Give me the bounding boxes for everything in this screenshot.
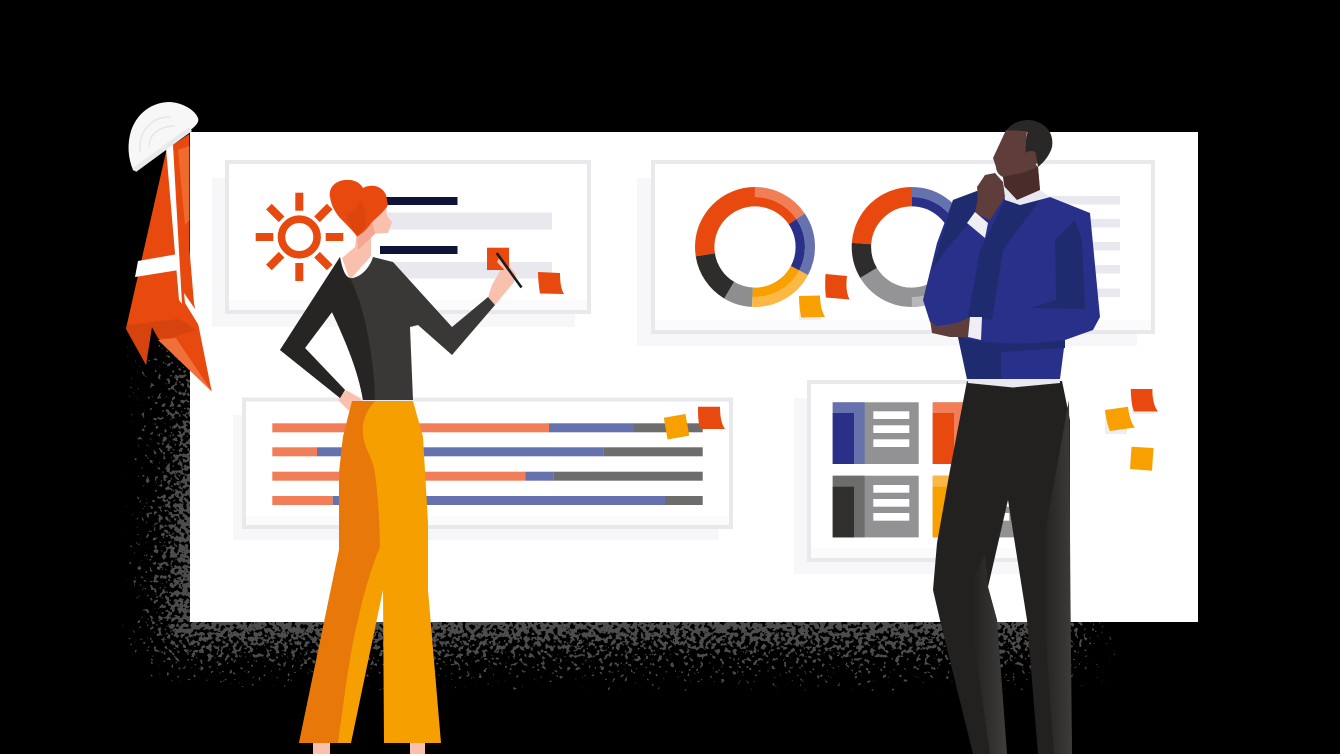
sticky notes: right cluster [1105, 389, 1158, 471]
text lines [380, 197, 552, 278]
whiteboard [190, 132, 1198, 622]
collar [1003, 185, 1050, 205]
hair [330, 180, 388, 236]
bar row 2 [272, 447, 703, 456]
trousers [933, 381, 1072, 754]
sticky note: red, top left panel [538, 272, 564, 294]
trousers [299, 401, 441, 743]
sticky note: yellow, bar panel [664, 414, 689, 439]
shirt hem [967, 378, 1060, 388]
lower hand at hip [338, 390, 364, 413]
panel: tiles [794, 382, 1040, 574]
icon: sun [256, 193, 343, 281]
tile: dark [833, 476, 919, 537]
sticky note: red, bar panel [698, 407, 725, 429]
pen [497, 253, 522, 288]
tile: yellow [933, 476, 1019, 537]
speckled board shadow [122, 345, 1118, 694]
man figure [923, 120, 1100, 754]
tile: blue [833, 402, 919, 464]
ear [1023, 150, 1039, 166]
feet [313, 742, 425, 754]
woman figure [280, 180, 522, 754]
hard hat [129, 102, 198, 172]
lower cuff [968, 317, 982, 340]
hair [1007, 120, 1052, 167]
bar row 1 [272, 423, 703, 432]
panel: sun and text lines [212, 162, 589, 327]
panel: stacked bars [233, 400, 731, 540]
sticky note: yellow, between donuts [799, 296, 825, 320]
hand holding pen [488, 258, 516, 305]
neck and face [342, 205, 392, 280]
sticky note: red, between donuts [825, 274, 850, 300]
sticky note being placed [487, 248, 509, 270]
panel: donut charts [637, 162, 1153, 346]
fingers [497, 258, 512, 274]
legend lines [1045, 196, 1120, 297]
safety vest [126, 134, 212, 392]
donut chart 2 [857, 192, 967, 302]
face and neck [993, 130, 1040, 202]
hand on chin [975, 173, 1005, 220]
bar row 3 [272, 472, 703, 481]
top [280, 257, 495, 400]
sweater [923, 191, 1100, 379]
lower hand [930, 317, 970, 337]
donut chart 1 [700, 192, 810, 302]
tile: red [933, 402, 1019, 464]
jaw shadow [1003, 167, 1040, 202]
neck shadow [357, 220, 375, 250]
upper cuff [967, 212, 988, 238]
bar row 4 [272, 496, 703, 505]
